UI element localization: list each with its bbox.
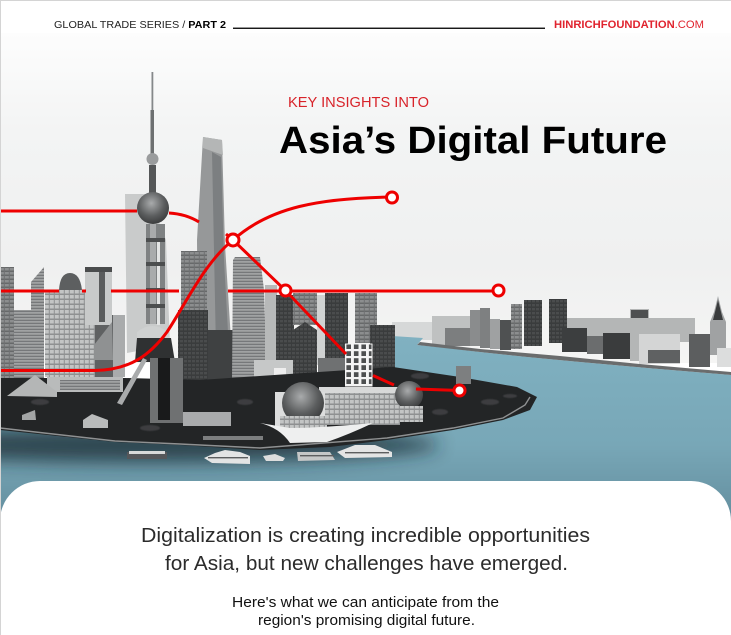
red network nodes [227, 192, 504, 396]
main title: Asia’s Digital Future [279, 120, 667, 162]
header rule [233, 28, 545, 29]
intro statement: Digitalization is creating incredible opportunities [141, 524, 590, 547]
distant skyline haze [392, 310, 695, 346]
header series label: GLOBAL TRADE SERIES / PART 2 [54, 19, 226, 31]
red network lines [0, 197, 498, 390]
white grid building [346, 344, 372, 386]
sky background [0, 33, 731, 363]
left skyline buildings [1, 267, 125, 380]
top header band [0, 0, 731, 33]
lead-in text [232, 595, 499, 629]
bottom white panel [0, 481, 731, 635]
riverbank shoreline [0, 397, 530, 448]
Shanghai World Financial Center [125, 194, 170, 353]
Shanghai Tower [197, 137, 233, 380]
boats [127, 445, 392, 464]
intro statement: for Asia, but new challenges have emerged. [165, 552, 568, 575]
intro statement [141, 524, 590, 575]
Oriental Pearl Tower [135, 72, 175, 362]
lead-in text: Here's what we can anticipate from the [232, 595, 499, 611]
lead-in text: region's promising digital future. [258, 613, 475, 629]
dark shoreline reflection on the water [0, 427, 440, 463]
waterfront land mass [0, 367, 537, 450]
kicker heading: KEY INSIGHTS INTO [288, 95, 429, 111]
river water [0, 336, 731, 535]
conference center [260, 381, 423, 443]
central towers [178, 251, 395, 388]
far bank buildings [417, 296, 731, 375]
park tree texture [31, 373, 517, 431]
low pavilions and pyramid [7, 358, 263, 440]
small tower near line end [456, 366, 471, 384]
header website: HINRICHFOUNDATION.COM [554, 19, 704, 31]
